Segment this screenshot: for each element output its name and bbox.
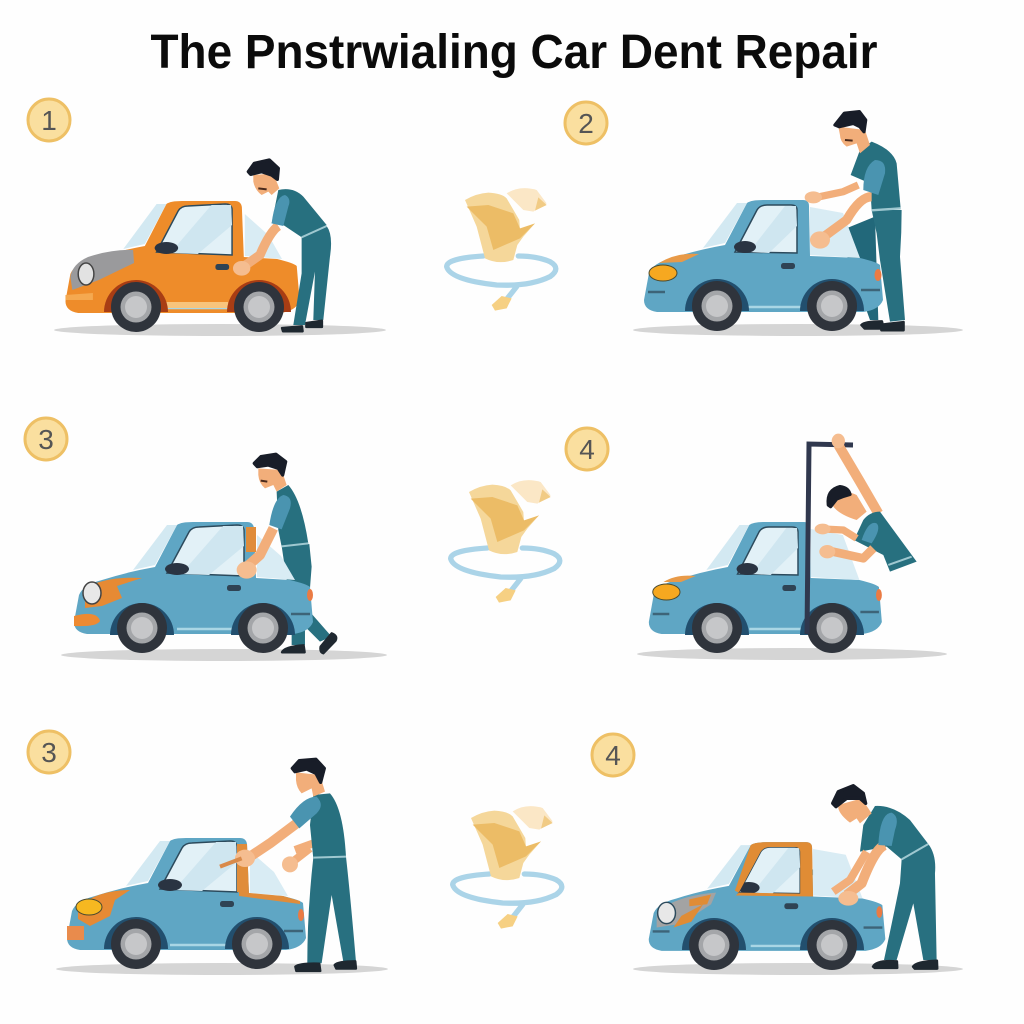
step badge 2 bbox=[565, 102, 607, 144]
title: The Pnstrwialing Car Dent Repair bbox=[150, 26, 878, 79]
step badge 3: 3 bbox=[38, 424, 54, 455]
step badge 4 lower bbox=[592, 734, 634, 776]
pole bbox=[807, 444, 853, 634]
step badge 2: 2 bbox=[578, 108, 594, 139]
scene 6: blue car with mechanic bending bbox=[633, 786, 963, 975]
step badge 4: 4 bbox=[579, 434, 595, 465]
scene 4: blue car with mechanic hanging from pole bbox=[637, 434, 947, 660]
step badge 4 bbox=[566, 428, 608, 470]
step badge 4 lower: 4 bbox=[605, 740, 621, 771]
mechanic bbox=[805, 112, 905, 330]
mechanic bbox=[237, 454, 336, 653]
scene 3: blue car with mechanic walking bbox=[61, 454, 387, 661]
scene 1: orange car with mechanic bbox=[54, 160, 386, 336]
icon: tool and hose 2 bbox=[451, 480, 560, 603]
step badge 3 bbox=[25, 418, 67, 460]
step badge 3 lower bbox=[28, 731, 70, 773]
step badge 1 bbox=[28, 99, 70, 141]
step badge 1: 1 bbox=[41, 105, 57, 136]
mechanic bbox=[815, 434, 917, 572]
scene 5: blue car with mechanic and tool bbox=[56, 759, 388, 975]
mechanic bbox=[833, 786, 937, 969]
mechanic bbox=[233, 160, 331, 331]
mechanic bbox=[220, 759, 356, 971]
icon: tool and hose 1 bbox=[447, 188, 556, 311]
scene 2: blue car with mechanic bbox=[633, 112, 963, 336]
step badge 3 lower: 3 bbox=[41, 737, 57, 768]
icon: tool and hose 3 bbox=[453, 806, 562, 929]
